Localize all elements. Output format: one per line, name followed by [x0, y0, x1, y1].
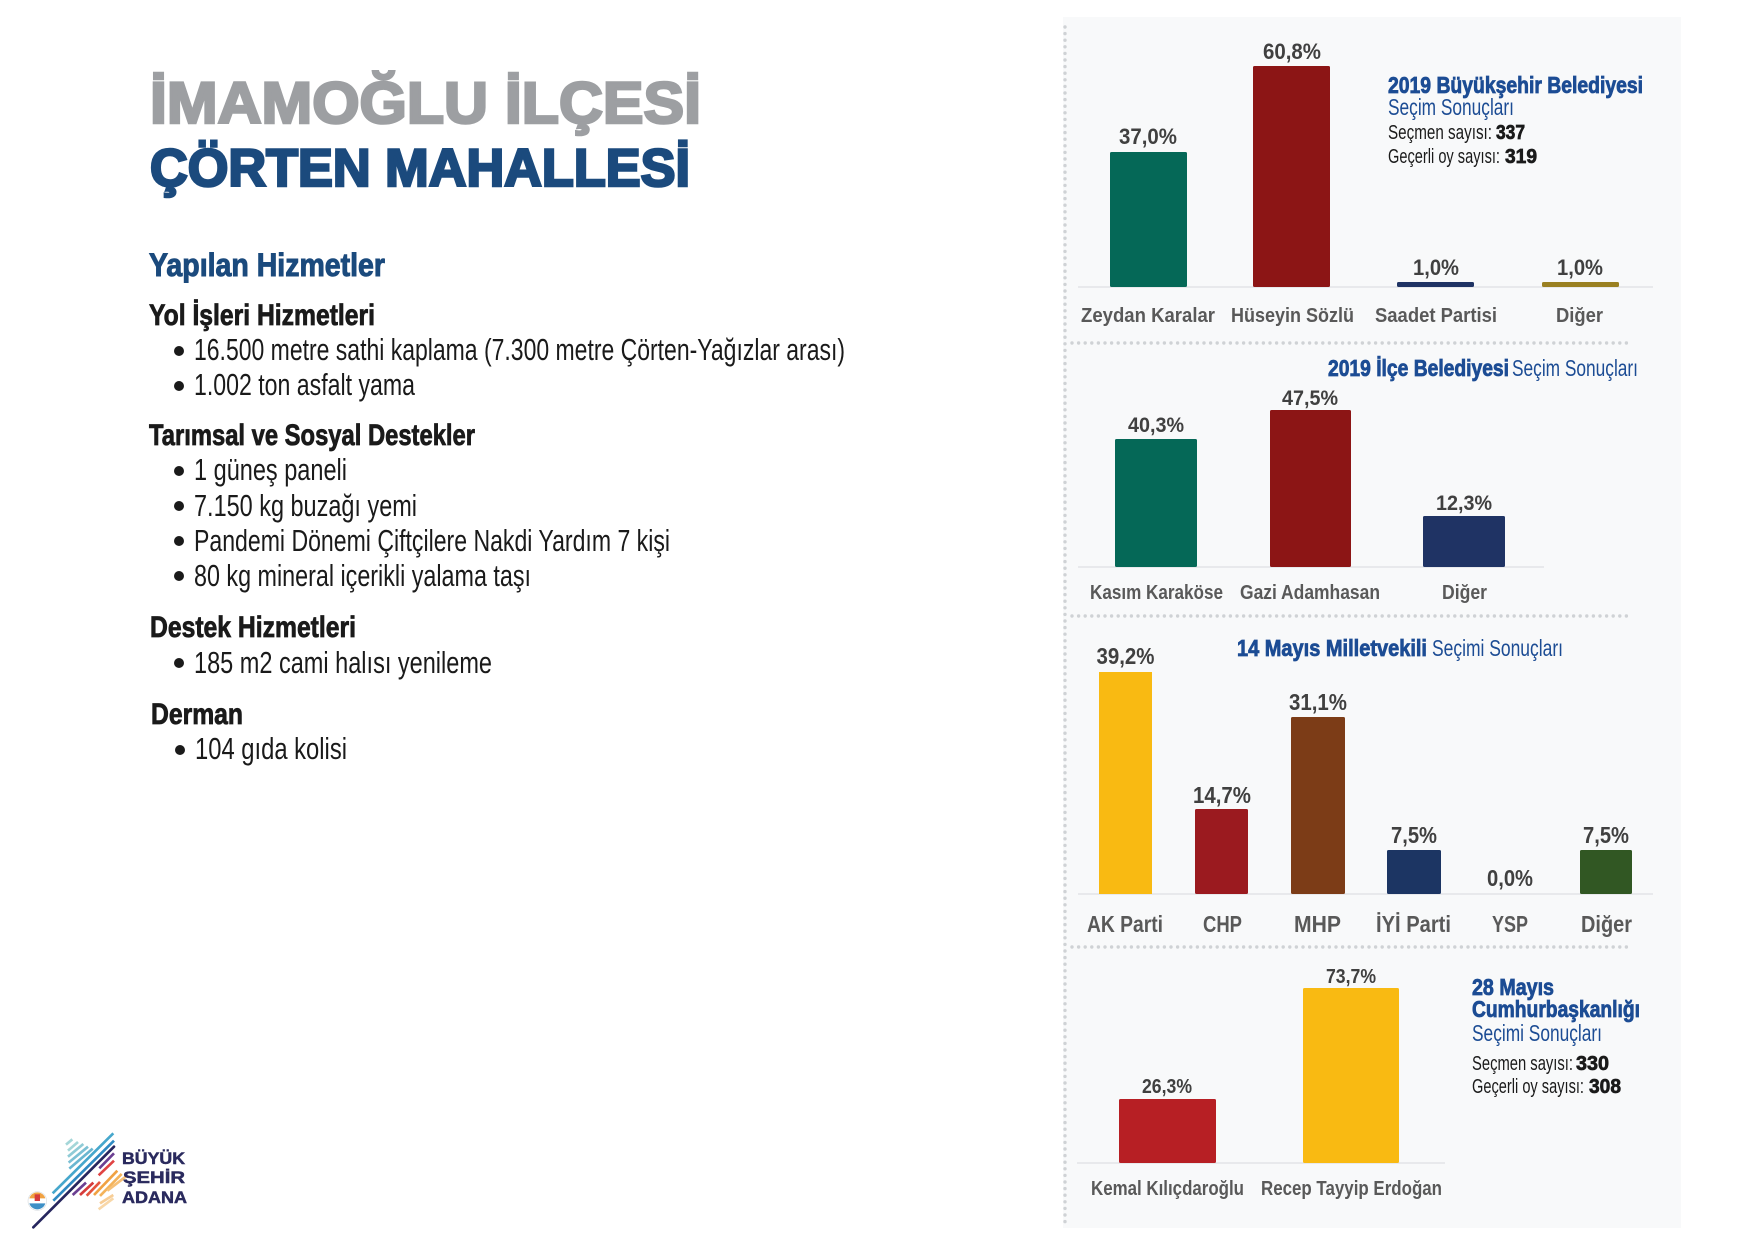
- chart heading and voter counts: Seçmen sayısı:: [1472, 1053, 1573, 1075]
- chart heading and voter counts: Geçerli oy sayısı:: [1472, 1076, 1584, 1098]
- section: road works: [149, 299, 845, 402]
- section: road works: 1.002 ton asfalt yama: [194, 367, 416, 402]
- section: agricultural and social support: Tarımsal ve Sosyal Destekler: [149, 419, 475, 452]
- chart: 28 May presidential: Recep Tayyip Erdoğan: [1261, 1178, 1442, 1200]
- chart heading and voter counts: Seçim Sonuçları: [1388, 94, 1514, 120]
- chart: 14 May parliamentary: Diğer: [1581, 911, 1632, 937]
- chart: 14 May parliamentary: CHP: [1203, 911, 1242, 937]
- section: support services: 185 m2 cami halısı yenileme: [194, 645, 492, 680]
- chart: 2019 metropolitan municipality: Saadet Partisi: [1375, 305, 1497, 327]
- title: İMAMOĞLU İLÇESİ: [150, 71, 701, 136]
- chart heading and voter counts: 337: [1496, 122, 1525, 144]
- section: support services: [150, 611, 492, 680]
- chart heading: [1237, 635, 1563, 661]
- chart: 14 May parliamentary: AK Parti: [1087, 911, 1163, 937]
- chart: 2019 district municipality: Diğer: [1442, 582, 1487, 604]
- chart: 2019 district municipality: Gazi Adamhasan: [1240, 582, 1380, 604]
- chart: 2019 district municipality: 12,3%: [1436, 492, 1492, 515]
- chart heading and voter counts: [1388, 72, 1643, 168]
- section: agricultural and social support: [149, 419, 670, 593]
- services list: [149, 247, 845, 766]
- chart: 2019 metropolitan municipality: Hüseyin Sözlü: [1231, 305, 1354, 327]
- chart: 2019 district municipality: 47,5%: [1282, 387, 1338, 410]
- section: road works: Yol İşleri Hizmetleri: [149, 299, 375, 332]
- chart heading: Seçimi Sonuçları: [1432, 635, 1563, 661]
- title: ÇÖRTEN MAHALLESİ: [150, 139, 690, 198]
- chart: 2019 metropolitan municipality: Diğer: [1556, 305, 1603, 327]
- panel: election results: [1063, 17, 1681, 1228]
- section: agricultural and social support: 80 kg mineral içerikli yalama taşı: [194, 558, 531, 593]
- chart: 14 May parliamentary: 31,1%: [1289, 689, 1347, 715]
- chart heading and voter counts: [1472, 974, 1640, 1098]
- chart: 14 May parliamentary: [1078, 635, 1653, 937]
- chart heading and voter counts: Seçmen sayısı:: [1388, 122, 1492, 144]
- section: agricultural and social support: Pandemi Dönemi Çiftçilere Nakdi Yardım 7 kişi: [194, 523, 670, 558]
- chart: 2019 district municipality: 40,3%: [1128, 414, 1184, 437]
- heading: services: Yapılan Hizmetler: [149, 247, 385, 283]
- chart: 14 May parliamentary: 39,2%: [1096, 643, 1154, 669]
- chart heading and voter counts: Geçerli oy sayısı:: [1388, 146, 1500, 168]
- chart: 28 May presidential: Kemal Kılıçdaroğlu: [1091, 1178, 1244, 1200]
- chart: 14 May parliamentary: YSP: [1492, 911, 1528, 937]
- logo mark: striped star: [33, 1133, 127, 1227]
- chart: 14 May parliamentary: 7,5%: [1391, 822, 1437, 848]
- logo wordmark: ADANA: [122, 1188, 187, 1207]
- chart heading and voter counts: Seçimi Sonuçları: [1472, 1020, 1602, 1046]
- chart heading and voter counts: 308: [1589, 1076, 1621, 1098]
- chart: 2019 district municipality: Kasım Karaköse: [1090, 582, 1223, 604]
- section: derman: [151, 698, 347, 766]
- section: derman: Derman: [151, 698, 243, 731]
- section: agricultural and social support: 7.150 kg buzağı yemi: [194, 488, 417, 523]
- chart: 2019 metropolitan municipality: [1078, 39, 1653, 327]
- chart: 2019 metropolitan municipality: 37,0%: [1119, 124, 1177, 149]
- chart: 14 May parliamentary: 14,7%: [1193, 782, 1251, 808]
- chart heading: Seçim Sonuçları: [1512, 355, 1638, 381]
- chart: 2019 metropolitan municipality: 60,8%: [1263, 39, 1321, 64]
- chart heading and voter counts: Cumhurbaşkanlığı: [1472, 996, 1640, 1022]
- chart: 14 May parliamentary: İYİ Parti: [1376, 911, 1451, 937]
- chart heading: 2019 İlçe Belediyesi: [1328, 355, 1509, 381]
- section: derman: 104 gıda kolisi: [195, 731, 347, 766]
- logo wordmark: ŞEHİR: [123, 1168, 185, 1187]
- logo: Büyükşehir Adana: [28, 1133, 187, 1227]
- chart heading and voter counts: 28 Mayıs: [1472, 974, 1554, 1000]
- chart: 28 May presidential: 26,3%: [1142, 1076, 1192, 1098]
- chart: 14 May parliamentary: 0,0%: [1487, 865, 1533, 891]
- logo wordmark: BÜYÜK: [122, 1149, 186, 1168]
- logo wordmark: [122, 1149, 187, 1207]
- section: agricultural and social support: 1 güneş paneli: [194, 452, 347, 487]
- title: [150, 71, 701, 198]
- chart heading: [1328, 355, 1638, 381]
- section: support services: Destek Hizmetleri: [150, 611, 356, 644]
- chart: 2019 metropolitan municipality: 1,0%: [1557, 255, 1603, 280]
- chart: 28 May presidential: [1077, 966, 1640, 1200]
- logo emblem: [28, 1192, 47, 1210]
- chart heading and voter counts: 330: [1576, 1053, 1609, 1075]
- chart heading and voter counts: 2019 Büyükşehir Belediyesi: [1388, 72, 1643, 98]
- chart: 2019 metropolitan municipality: Zeydan Karalar: [1081, 305, 1215, 327]
- chart heading: 14 Mayıs Milletvekili: [1237, 635, 1427, 661]
- chart heading and voter counts: 319: [1505, 146, 1537, 168]
- chart: 2019 metropolitan municipality: 1,0%: [1413, 255, 1459, 280]
- section: road works: 16.500 metre sathi kaplama (7.300 metre Çörten-Yağızlar arası): [194, 332, 845, 367]
- chart: 28 May presidential: 73,7%: [1326, 966, 1376, 988]
- chart: 2019 district municipality: [1078, 355, 1638, 604]
- chart: 14 May parliamentary: MHP: [1294, 911, 1341, 937]
- chart: 14 May parliamentary: 7,5%: [1583, 822, 1629, 848]
